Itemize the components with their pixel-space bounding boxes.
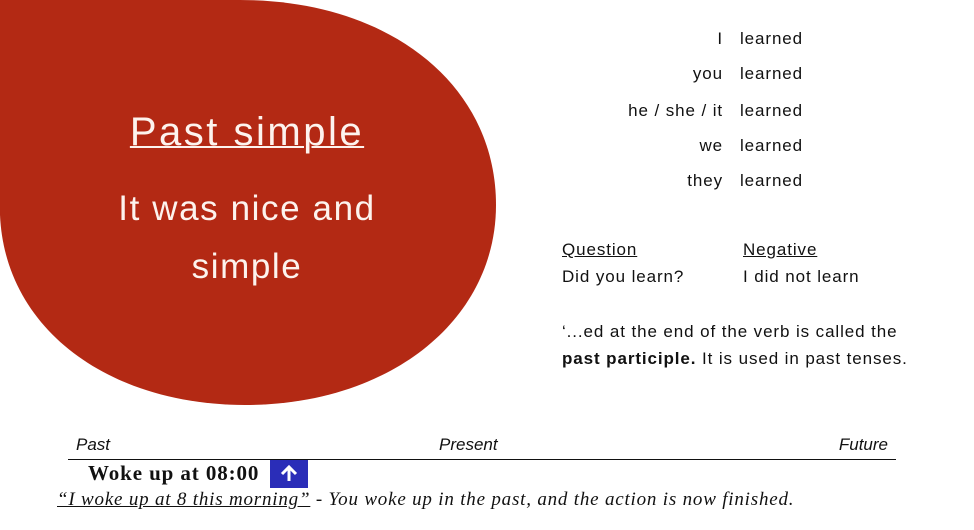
question and negative (562, 240, 860, 286)
timeline: Past (76, 435, 110, 454)
conjugation table: learned (740, 29, 803, 48)
subtitle: It was nice and (118, 189, 376, 228)
conjugation table: I (717, 29, 723, 48)
event label: Woke up at 08:00 (88, 461, 259, 485)
conjugation table: he / she / it (628, 101, 723, 120)
subtitle (118, 189, 376, 286)
conjugation table: learned (740, 171, 803, 190)
conjugation table: you (693, 64, 723, 83)
question and negative: Negative (743, 240, 817, 259)
subtitle: simple (192, 247, 302, 286)
title: Past simple (130, 110, 364, 154)
red blob panel (0, 0, 496, 405)
past participle note (562, 322, 908, 368)
past participle note: ‘...ed at the end of the verb is called the (562, 322, 897, 341)
conjugation table: learned (740, 101, 803, 120)
question and negative: I did not learn (743, 267, 860, 286)
conjugation table: learned (740, 136, 803, 155)
question and negative: Question (562, 240, 637, 259)
conjugation table: we (699, 136, 723, 155)
conjugation table: learned (740, 64, 803, 83)
icon: up arrow (270, 460, 308, 488)
conjugation table (628, 29, 803, 190)
question and negative: Did you learn? (562, 267, 684, 286)
example sentence: “I woke up at 8 this morning” - You woke up in the past, and the action is now finished. (57, 489, 794, 510)
timeline (68, 435, 896, 460)
past participle note: past participle. It is used in past tenses. (562, 349, 908, 368)
conjugation table: they (687, 171, 723, 190)
timeline: Future (839, 435, 888, 454)
timeline: Present (439, 435, 498, 454)
